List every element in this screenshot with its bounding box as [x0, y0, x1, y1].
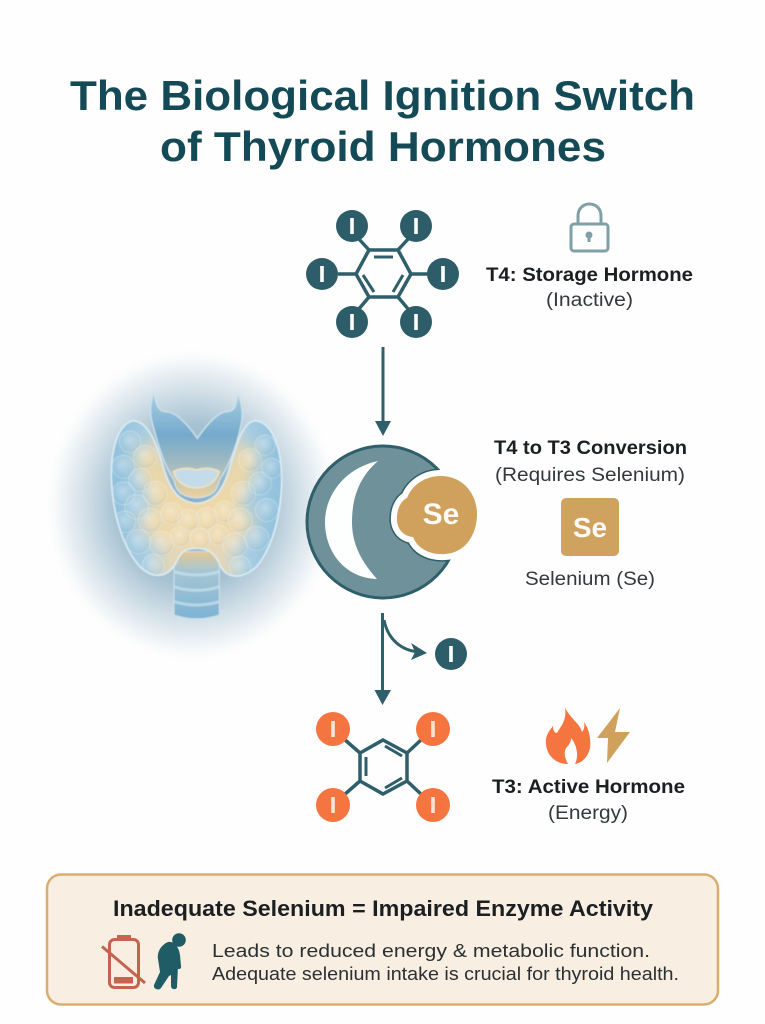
label: T4 storage hormone: T4: Storage Hormone [486, 265, 693, 286]
icon: low battery [102, 935, 145, 988]
icon: flame [546, 708, 590, 764]
label: T4 to T3 conversion: T4 to T3 Conversion [494, 438, 687, 459]
callout: inadequate selenium [47, 874, 718, 1004]
selenium tile [561, 498, 619, 556]
title [70, 72, 695, 170]
callout text [212, 941, 679, 984]
T4 molecule [306, 210, 459, 338]
icon: tired person [154, 933, 186, 989]
label: T4 storage hormone: (Inactive) [546, 290, 633, 311]
arrows: conversion output and released iodine [374, 613, 467, 705]
label: T4 to T3 conversion [494, 438, 687, 486]
enzyme crescent [325, 461, 378, 579]
title: of Thyroid Hormones [160, 123, 606, 170]
title: The Biological Ignition Switch [70, 72, 695, 119]
callout text: Leads to reduced energy & metabolic function. [212, 941, 650, 961]
callout text: Adequate selenium intake is crucial for thyroid health. [212, 964, 679, 984]
callout heading: Inadequate Selenium = Impaired Enzyme Activity [113, 896, 654, 921]
selenium blob: Se [423, 498, 459, 531]
selenium halo outline [389, 468, 447, 562]
label: T4 to T3 conversion: (Requires Selenium) [495, 465, 685, 486]
label: T3 active hormone: (Energy) [548, 803, 628, 824]
icon: padlock [571, 204, 608, 251]
cartilage [151, 393, 242, 498]
label: selenium: Selenium (Se) [525, 569, 655, 590]
icon: lightning bolt [597, 708, 630, 763]
label: T3 active hormone [492, 777, 685, 824]
T3 molecule [316, 712, 450, 822]
selenium blob [397, 476, 477, 554]
trachea [174, 552, 219, 619]
label: T4 storage hormone [486, 265, 693, 311]
selenium tile: Se [573, 512, 607, 543]
label: T3 active hormone: T3: Active Hormone [492, 777, 685, 798]
thyroid lobes [111, 421, 282, 577]
deiodinase enzyme with selenium [307, 446, 477, 598]
arrow: T4 to enzyme [375, 347, 391, 436]
thyroid illustration with glow [56, 360, 324, 650]
